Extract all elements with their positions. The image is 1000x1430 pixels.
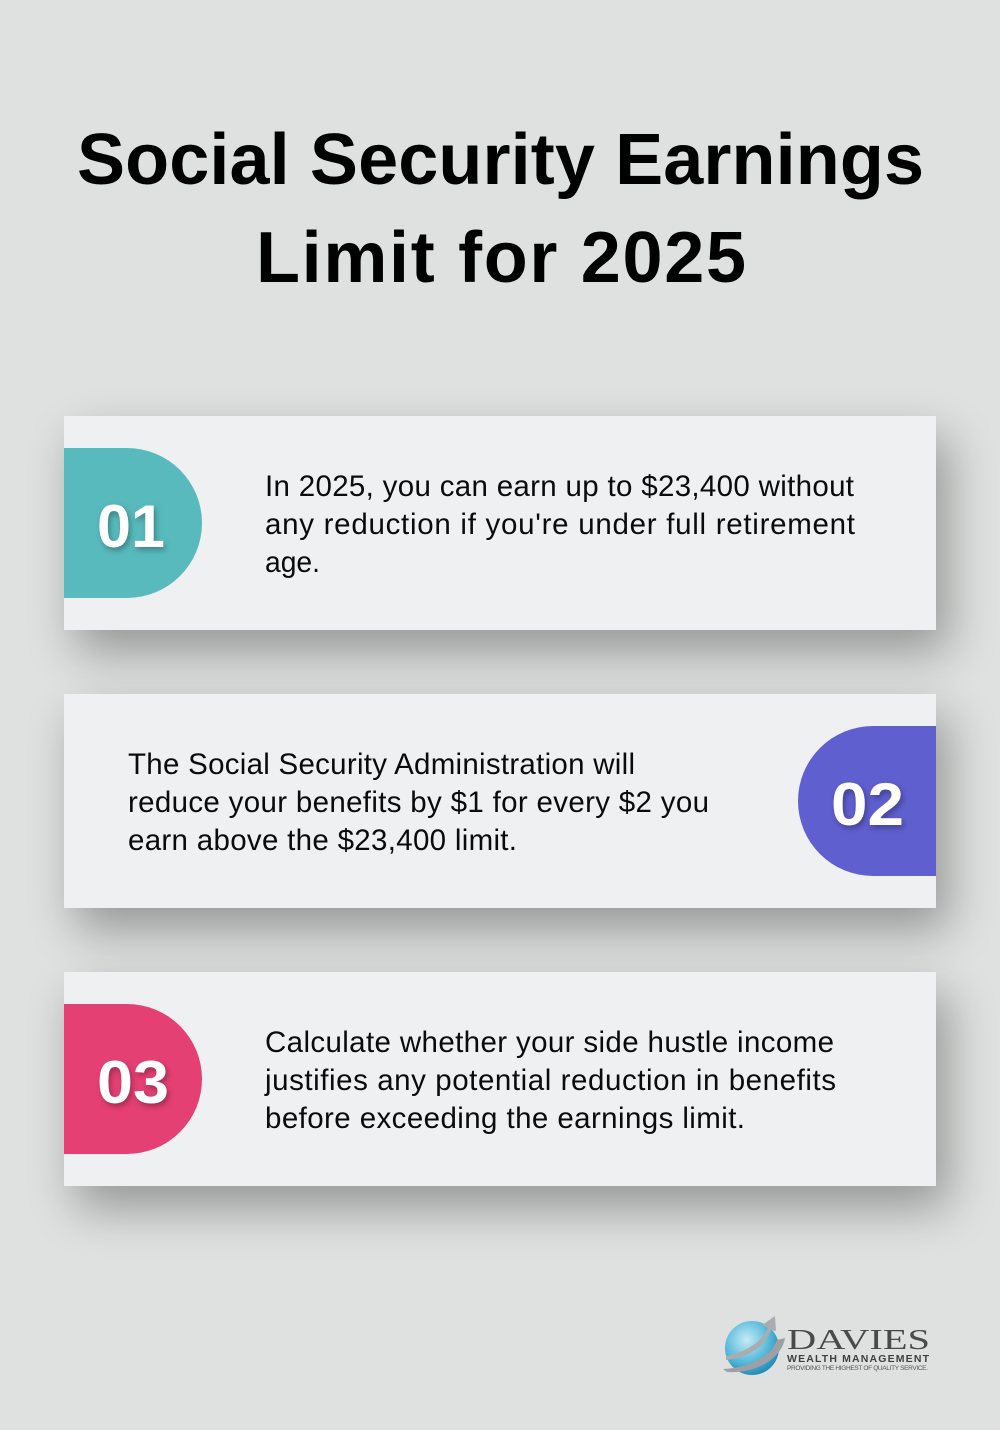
logo: Davies Wealth Management: [723, 1316, 930, 1375]
number 03: 03: [97, 1049, 169, 1116]
wordmark: PROVIDING THE HIGHEST OF QUALITY SERVICE.: [787, 1365, 928, 1372]
number 02: 02: [831, 771, 904, 838]
text: step 1: age.: [265, 546, 320, 579]
badge: 02: [798, 726, 936, 876]
panel: step 2 card: [64, 694, 936, 908]
panel: step 1 card: [64, 416, 936, 630]
text: step 3: before exceeding the earnings limit.: [265, 1102, 745, 1135]
wordmark: WEALTH MANAGEMENT: [787, 1353, 930, 1365]
title: Social Security Earnings: [77, 120, 924, 200]
badge: 03: [64, 1004, 202, 1154]
text: step 3: justifies any potential reduction in benefits: [264, 1064, 836, 1097]
text: step 2: [128, 748, 709, 857]
text: step 2: earn above the $23,400 limit.: [128, 824, 517, 857]
text: step 1: In 2025, you can earn up to $23,400 without: [265, 470, 854, 503]
badge: 01: [64, 448, 202, 598]
text: step 2: The Social Security Administration will: [128, 748, 635, 781]
text: step 1: any reduction if you're under full retirement: [265, 508, 855, 541]
number 01: 01: [97, 493, 165, 560]
wordmark: [787, 1324, 930, 1372]
wordmark: DAVIES: [787, 1324, 930, 1356]
text: step 3: [264, 1026, 836, 1135]
title: [77, 120, 924, 298]
icon: globe with arrows: [723, 1316, 785, 1375]
title: Limit for 2025: [256, 218, 746, 298]
text: step 1: [265, 470, 855, 579]
text: step 2: reduce your benefits by $1 for every $2 you: [128, 786, 709, 819]
panel: step 3 card: [64, 972, 936, 1186]
text: step 3: Calculate whether your side hustle income: [265, 1026, 834, 1059]
